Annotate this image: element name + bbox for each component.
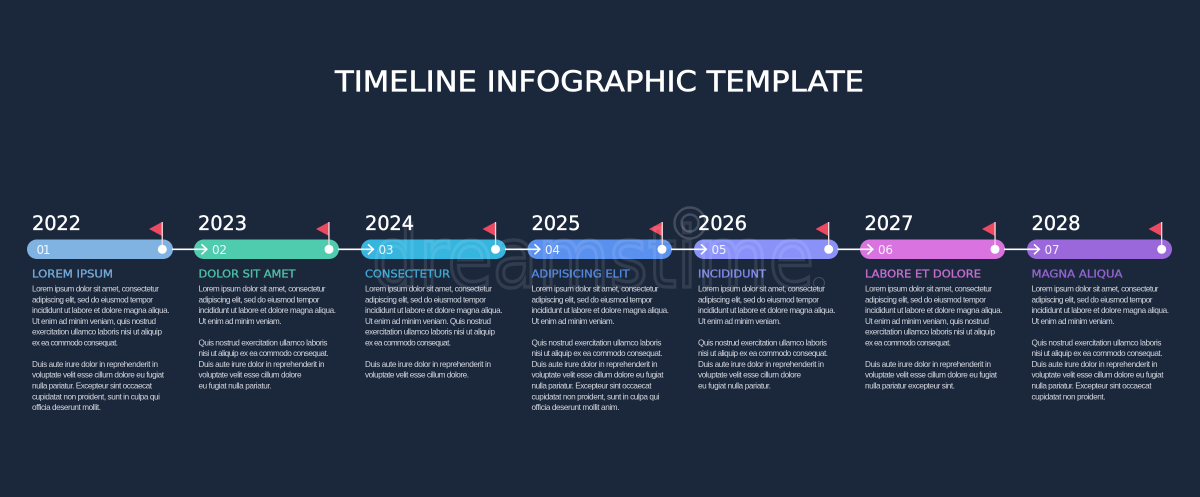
- body text: adipiscing elit, sed do eiusmod tempor: [198, 295, 320, 304]
- body text: Duis aute irure dolor in reprehenderit in: [365, 360, 491, 369]
- body text: Lorem ipsum dolor sit amet, consectetur: [365, 284, 492, 294]
- icon: red flag: [649, 222, 666, 254]
- icon: red flag: [1148, 222, 1166, 254]
- body text: officia deserunt mollit anim.: [532, 403, 620, 412]
- arrow 6 to 7: [1004, 244, 1039, 254]
- panel: 2022 step 01: [27, 212, 173, 412]
- pill bar 02: [194, 240, 339, 259]
- body text: Duis aute irure dolor in reprehenderit in: [32, 360, 158, 369]
- pill bar 03: [361, 240, 506, 259]
- heading: INCIDIDUNT: [698, 268, 766, 280]
- body text: nulla pariatur. Excepteur sint occaecat: [32, 382, 153, 390]
- body text: eu fugiat nulla pariatur.: [698, 382, 771, 390]
- year 2022: 2022: [32, 212, 81, 235]
- title: TIMELINE INFOGRAPHIC TEMPLATE: [334, 66, 864, 98]
- body text: voluptate velit esse cillum dolore eu fugiat: [1032, 371, 1164, 380]
- arrows connecting the steps: [172, 244, 1039, 254]
- heading: CONSECTETUR: [365, 268, 450, 280]
- arrow 5 to 6: [838, 244, 873, 254]
- step number 06: 06: [878, 243, 893, 257]
- step number 04: 04: [545, 243, 560, 257]
- body text: Ut enim ad minim veniam, quis nostrud: [32, 317, 156, 326]
- arrow 4 to 5: [671, 244, 706, 254]
- body text: nulla pariatur. Excepteur sint occaecat: [1032, 382, 1152, 390]
- body text: [198, 284, 336, 390]
- body text: voluptate velit esse cillum dolore: [698, 371, 801, 380]
- body text: Ut enim ad minim veniam. Quis nostrud: [365, 317, 491, 326]
- body text: voluptate velit esse cillum dolore eu fugiat: [32, 371, 165, 380]
- year 2023: 2023: [198, 212, 247, 235]
- body text: nulla pariatur. Excepteur sint occaecat: [532, 382, 652, 390]
- body text: Quis nostrud exercitation ullamco laboris: [698, 338, 827, 347]
- body text: exercitation ullamco laboris nisi ut aliquip: [865, 328, 995, 337]
- body text: adipiscing elit, sed do eiusmod tempor: [698, 295, 819, 304]
- body text: adipiscing elit, sed do eiusmod tempor: [365, 295, 486, 304]
- body text: Lorem ipsum dolor sit amet, consectetur: [1032, 284, 1159, 294]
- panel: 2023 step 02: [194, 212, 339, 390]
- body text: eu fugiat nulla pariatur.: [198, 382, 272, 390]
- heading: LABORE ET DOLORE: [865, 268, 981, 280]
- body text: exercitation ullamco laboris nisi ut aliquip: [365, 328, 495, 337]
- body text: incididunt ut labore et dolore magna aliqua.: [698, 306, 836, 315]
- body text: Duis aute irure dolor in reprehenderit in: [865, 360, 991, 369]
- body text: Duis aute irure dolor in reprehenderit in: [198, 360, 325, 369]
- body text: adipiscing elit, sed do eiusmod tempor: [532, 295, 653, 304]
- icon: red flag: [482, 222, 500, 254]
- body text: Duis aute irure dolor in reprehenderit in: [698, 360, 824, 369]
- pill bar 05: [694, 240, 838, 259]
- body text: nisi ut aliquip ex ea commodo consequat.: [532, 349, 662, 358]
- body text: Ut enim ad minim veniam.: [1032, 317, 1114, 326]
- body text: Lorem ipsum dolor sit amet, consectetur: [532, 284, 659, 294]
- body text: cupidatat non proident, sunt in culpa qui: [532, 392, 660, 401]
- icon: red flag: [816, 222, 833, 254]
- icon: red flag: [316, 222, 334, 254]
- body text: incididunt ut labore et dolore magna aliqua.: [32, 306, 170, 315]
- body text: ex ea commodo consequat.: [865, 338, 951, 347]
- body text: nulla pariatur excepteur sint.: [865, 382, 955, 390]
- body text: adipiscing elit, sed do eiusmod tempor: [32, 295, 153, 304]
- pill bar 04: [528, 240, 672, 259]
- body text: exercitation ullamco laboris nisi ut aliquip: [32, 328, 162, 337]
- panel: 2026 step 05: [694, 212, 838, 390]
- body text: incididunt ut labore et dolore magna aliqua.: [365, 306, 502, 315]
- body text: voluptate velit esse cillum dolore eu fugiat: [865, 371, 998, 380]
- body text: incididunt ut labore et dolore magna aliqua.: [865, 306, 1002, 315]
- arrow 1 to 2: [172, 244, 207, 254]
- body text: cupidatat non proident, sunt in culpa qui: [32, 392, 160, 401]
- body text: Ut enim ad minim veniam.: [198, 317, 282, 326]
- heading: LOREM IPSUM: [32, 268, 113, 280]
- body text: Quis nostrud exercitation ullamco laboris: [198, 338, 328, 347]
- body text: Lorem ipsum dolor sit amet, consectetur: [698, 284, 825, 294]
- icon: red flag: [149, 222, 167, 254]
- heading: ADIPISICING ELIT: [532, 268, 630, 280]
- body text: Quis nostrud exercitation ullamco laboris: [532, 338, 662, 347]
- step number 05: 05: [712, 243, 726, 257]
- panel: 2024 step 03: [361, 212, 506, 380]
- watermark spiral dot: [674, 208, 706, 238]
- body text: Lorem ipsum dolor sit amet, consectetur: [32, 284, 159, 294]
- step number 01: 01: [36, 243, 50, 257]
- body text: [698, 284, 836, 390]
- body text: adipiscing elit, sed do eiusmod tempor: [865, 295, 986, 304]
- heading: DOLOR SIT AMET: [198, 268, 296, 280]
- pill bar 01: [27, 240, 173, 259]
- body text: voluptate velit esse cillum dolore: [198, 371, 302, 380]
- arrow 3 to 4: [505, 244, 540, 254]
- body text: voluptate velit esse cillum dolore.: [365, 371, 469, 380]
- year 2027: 2027: [864, 212, 914, 235]
- body text: incididunt ut labore et dolore magna aliqua.: [1032, 306, 1169, 315]
- body text: officia deserunt mollit.: [32, 403, 101, 412]
- body text: Lorem ipsum dolor sit amet, consectetur: [865, 284, 992, 294]
- step number 03: 03: [378, 243, 394, 257]
- body text: Ut enim ad minim veniam.: [698, 317, 781, 326]
- body text: [365, 284, 502, 380]
- watermark wordmark: dreamstime: [372, 209, 814, 307]
- pill bar 06: [860, 240, 1005, 259]
- year 2028: 2028: [1032, 212, 1080, 235]
- pill bar 07: [1027, 240, 1172, 259]
- body text: incididunt ut labore et dolore magna aliqua.: [198, 306, 336, 315]
- body text: [1032, 284, 1169, 401]
- body text: nisi ut aliquip ex ea commodo consequat.: [1032, 349, 1162, 358]
- year 2026: 2026: [698, 212, 747, 235]
- panel: 2025 step 04: [528, 212, 672, 412]
- body text: [532, 284, 669, 412]
- body text: Quis nostrud exercitation ullamco laboris: [1032, 338, 1162, 347]
- body text: Duis aute irure dolor in reprehenderit in: [1032, 360, 1158, 369]
- body text: Ut enim ad minim veniam, quis nostrud: [865, 317, 989, 326]
- year 2025: 2025: [532, 212, 580, 235]
- watermark: [372, 208, 824, 307]
- heading: MAGNA ALIQUA: [1032, 268, 1123, 280]
- body text: nisi ut aliquip ex ea commodo consequat.: [698, 349, 828, 358]
- year 2024: 2024: [365, 212, 414, 235]
- body text: Duis aute irure dolor in reprehenderit in: [532, 360, 658, 369]
- step number 02: 02: [212, 243, 227, 257]
- body text: [865, 284, 1002, 390]
- body text: cupidatat non proident.: [1032, 392, 1106, 401]
- body text: ex ea commodo consequat.: [32, 338, 118, 347]
- body text: nisi ut aliquip ex ea commodo consequat.: [198, 349, 328, 358]
- step number 07: 07: [1044, 243, 1060, 257]
- body text: Lorem ipsum dolor sit amet, consectetur: [198, 284, 326, 294]
- body text: incididunt ut labore et dolore magna aliqua.: [532, 306, 669, 315]
- body text: [32, 284, 170, 412]
- body text: adipiscing elit, sed do eiusmod tempor: [1032, 295, 1153, 304]
- icon: red flag: [982, 222, 1000, 254]
- body text: Ut enim ad minim veniam.: [532, 317, 614, 326]
- arrow 2 to 3: [338, 244, 373, 254]
- panel: 2028 step 07: [1027, 212, 1172, 401]
- body text: ex ea commodo consequat.: [365, 338, 451, 347]
- panel: 2027 step 06: [860, 212, 1005, 390]
- registered mark: [814, 278, 824, 288]
- body text: voluptate velit esse cillum dolore eu fugiat: [532, 371, 664, 380]
